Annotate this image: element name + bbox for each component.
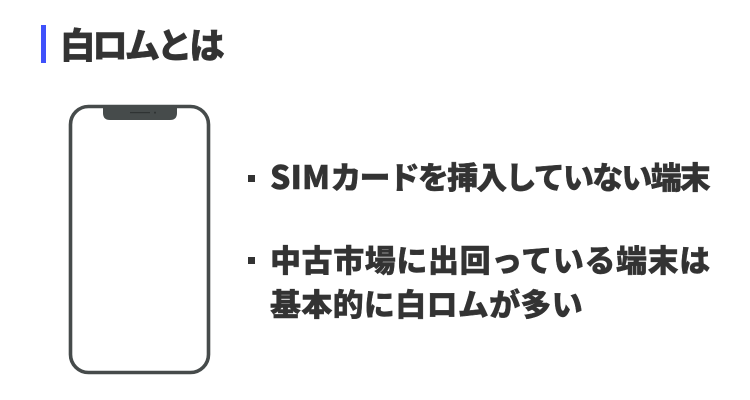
text: bullet 1: SIMカードを挿入していない端末 xyxy=(270,153,709,199)
bullet 1 xyxy=(248,175,255,182)
icon: smartphone xyxy=(68,104,210,374)
text: bullet 2: 基本的に白ロムが多い xyxy=(270,280,583,325)
heading accent bar xyxy=(41,25,46,63)
text: bullet 2 xyxy=(270,236,711,325)
title: 白ロムとは xyxy=(60,18,222,69)
text: bullet 2: 中古市場に出回っている端末は xyxy=(270,236,711,281)
bullet 2 xyxy=(248,257,255,264)
